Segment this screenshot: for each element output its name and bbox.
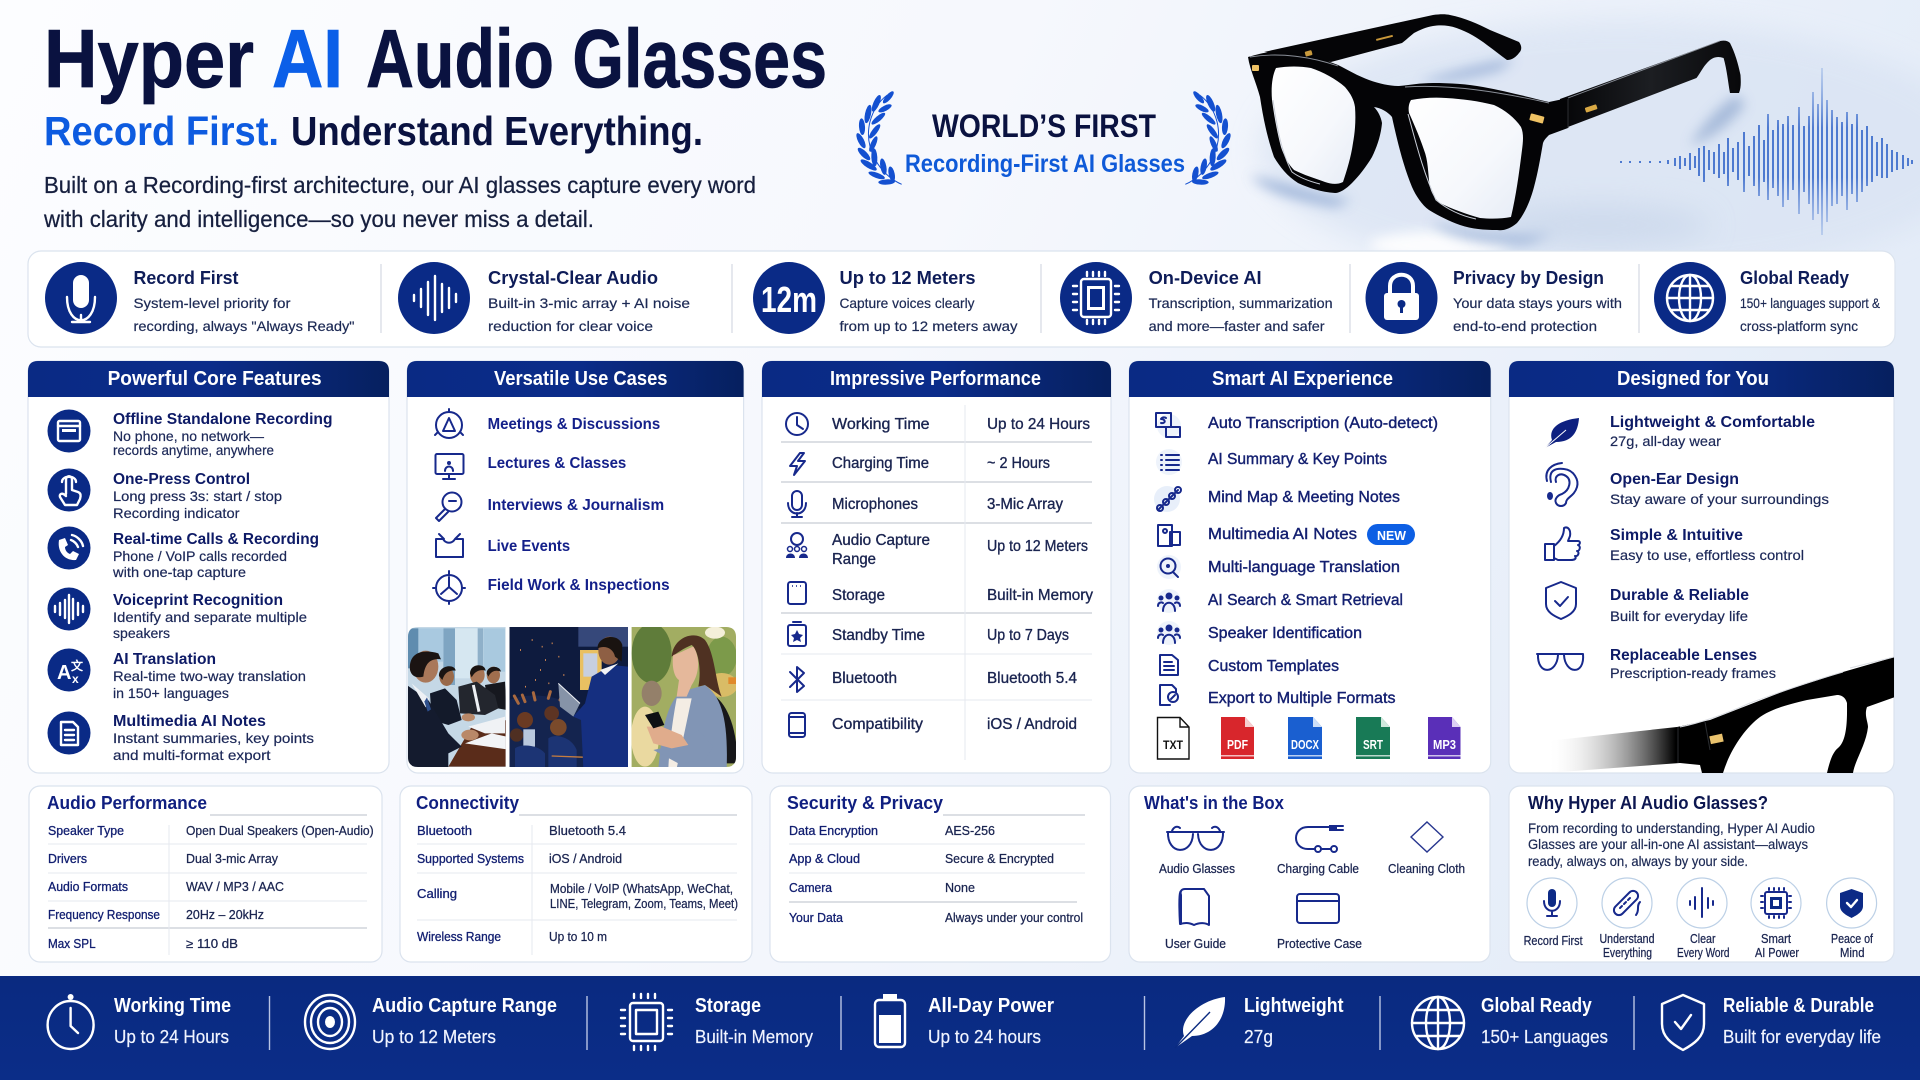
- use case: field work: [433, 571, 670, 604]
- ai feature: mind map: [1154, 486, 1400, 512]
- highlight: record first: System-level priority for: [134, 295, 291, 311]
- feature: calls and recording: with one-tap capture: [112, 564, 246, 580]
- use case: lectures: Lectures & Classes: [488, 455, 626, 472]
- feature: one-press control: [48, 468, 282, 521]
- design: lenses: [1537, 647, 1776, 681]
- feature: AI translation: [48, 648, 306, 701]
- ai feature: summary: [1156, 449, 1387, 475]
- panel: versatile use cases: [405, 361, 744, 773]
- highlight: global ready: 150+ languages support &: [1740, 295, 1881, 311]
- spec: compatibility: Compatibility: [832, 716, 923, 733]
- spec: audio capture range: Range: [832, 551, 876, 568]
- feature: multimedia notes: and multi-format export: [113, 747, 271, 763]
- box item: cleaning cloth: Cleaning Cloth: [1388, 862, 1465, 876]
- icon: TXT file: [1158, 718, 1189, 759]
- box item: protective case: Protective Case: [1277, 937, 1362, 951]
- table: security specs: AES-256: [945, 824, 995, 838]
- feature: voiceprint recognition: Identify and separate multiple: [113, 609, 307, 625]
- spec: charging time: ~ 2 Hours: [987, 455, 1050, 472]
- table: security specs: Camera: [789, 881, 832, 895]
- use case: interviews: [436, 492, 664, 521]
- feature: AI translation: x: [72, 672, 79, 686]
- feature: AI translation: AI Translation: [113, 651, 216, 668]
- box item: charging cable: [1277, 825, 1359, 876]
- table: connectivity specs: Bluetooth 5.4: [549, 824, 626, 838]
- ai feature: translation: [1157, 555, 1400, 579]
- icon: MP3 file: MP3: [1433, 737, 1456, 752]
- spec: audio capture range: [786, 532, 1088, 568]
- highlight: on-device AI: Transcription, summarization: [1149, 295, 1333, 311]
- ai feature: translation: Multi-language Translation: [1208, 559, 1400, 576]
- spec: storage: Storage: [832, 587, 885, 604]
- title: AI: [272, 12, 343, 105]
- icon: MP3 file: [1428, 717, 1460, 759]
- panel: powerful core features: [28, 361, 389, 773]
- use case: interviews: Interviews & Journalism: [488, 497, 664, 514]
- heading: Powerful Core Features: [108, 368, 322, 390]
- box item: audio glasses: Audio Glasses: [1159, 862, 1235, 876]
- stat: reliable and durable: [1662, 995, 1881, 1050]
- benefit: smart AI power: Smart: [1761, 932, 1791, 946]
- icon: left laurel: [855, 90, 902, 185]
- spec: storage: Built-in Memory: [987, 587, 1093, 604]
- table: audio specs: Audio Formats: [48, 880, 128, 894]
- benefit: peace of mind: Mind: [1840, 946, 1865, 960]
- feature: offline recording: [48, 410, 332, 458]
- benefit: clear every word: Clear: [1690, 932, 1716, 946]
- stat: storage: Built-in Memory: [695, 1027, 813, 1047]
- benefit: clear every word: [1677, 878, 1730, 960]
- spec: working time: Up to 24 Hours: [987, 416, 1090, 433]
- spec: microphones: Microphones: [832, 496, 918, 513]
- stat: lightweight: [1175, 995, 1344, 1048]
- badge text: [905, 108, 1185, 178]
- box item: protective case: [1277, 894, 1362, 951]
- heading: [407, 361, 744, 397]
- subtitle: Record First.: [44, 108, 279, 154]
- benefit: understand everything: Understand: [1600, 932, 1655, 946]
- box item: cleaning cloth: [1388, 822, 1465, 876]
- ai feature: search: [1157, 589, 1403, 613]
- stat: storage: Storage: [695, 995, 761, 1017]
- ai feature: export formats: Export to Multiple Formats: [1208, 690, 1396, 707]
- heading: [1509, 361, 1894, 397]
- stat: global ready: [1412, 995, 1608, 1049]
- panel: audio performance: [29, 786, 382, 962]
- description: [1528, 820, 1815, 869]
- heading: Connectivity: [416, 793, 519, 813]
- table: connectivity specs: [417, 824, 738, 944]
- stat: lightweight: 27g: [1244, 1027, 1273, 1047]
- stat: all-day power: Up to 24 hours: [928, 1027, 1041, 1047]
- description: Glasses are your all-in-one AI assistant—always: [1528, 836, 1808, 852]
- stat: all-day power: [875, 994, 1054, 1047]
- feature: calls and recording: Phone / VoIP calls recorded: [113, 548, 287, 564]
- highlight: up to 12 meters: from up to 12 meters away: [840, 318, 1018, 334]
- spec: bluetooth: Bluetooth 5.4: [987, 670, 1077, 687]
- feature: calls and recording: [48, 526, 319, 580]
- stat: reliable and durable: Built for everyday life: [1723, 1027, 1881, 1047]
- table: audio specs: Open Dual Speakers (Open-Audio): [186, 824, 374, 838]
- ai feature: speaker identification: [1157, 621, 1362, 645]
- sound waveform: [1621, 68, 1912, 235]
- table: audio specs: WAV / MP3 / AAC: [186, 880, 284, 894]
- table: security specs: [789, 824, 1083, 925]
- stat: working time: Working Time: [114, 995, 231, 1017]
- icon: TXT file: TXT: [1163, 738, 1184, 752]
- design: lenses: Replaceable Lenses: [1610, 647, 1757, 664]
- spec: working time: [786, 413, 1090, 435]
- highlight: on-device AI: and more—faster and safer: [1149, 318, 1325, 334]
- feature: voiceprint recognition: speakers: [113, 625, 170, 641]
- stat: working time: [48, 994, 231, 1049]
- heading: [762, 361, 1111, 397]
- icon: right laurel: [1185, 90, 1232, 185]
- box item: user guide: User Guide: [1165, 937, 1226, 951]
- highlight: privacy by design: Privacy by Design: [1453, 268, 1604, 288]
- highlight: global ready: Global Ready: [1740, 268, 1849, 288]
- design: open-ear: Open-Ear Design: [1610, 471, 1739, 488]
- highlight: on-device AI: On-Device AI: [1149, 268, 1262, 288]
- benefit: understand everything: Everything: [1603, 946, 1652, 960]
- icon: SRT file: SRT: [1363, 737, 1383, 752]
- title: Hyper: [44, 12, 254, 105]
- highlight: up to 12 meters: Capture voices clearly: [840, 295, 974, 311]
- design: lenses: Prescription-ready frames: [1610, 665, 1776, 681]
- heading: Versatile Use Cases: [494, 368, 668, 390]
- feature: one-press control: Long press 3s: start / stop: [113, 488, 282, 504]
- subtitle: Understand Everything.: [291, 108, 703, 154]
- icon: DOCX file: DOCX: [1291, 738, 1320, 752]
- benefit: smart AI power: AI Power: [1755, 946, 1799, 960]
- icon: DOCX file: [1288, 717, 1322, 759]
- use case: lectures: [436, 454, 626, 479]
- spec: standby time: [788, 622, 1069, 646]
- heading: Security & Privacy: [787, 793, 943, 813]
- badge text: Recording-First AI Glasses: [905, 150, 1185, 178]
- feature: one-press control: One-Press Control: [113, 471, 250, 488]
- table: connectivity specs: LINE, Telegram, Zoom, Teams, Meet): [550, 897, 738, 911]
- feature: voiceprint recognition: Voiceprint Recognition: [113, 592, 283, 609]
- highlight: global ready: cross-platform sync: [1740, 318, 1858, 334]
- spec: audio capture range: Audio Capture: [832, 532, 930, 549]
- highlight: record first: [45, 262, 355, 334]
- benefit: smart AI power: [1751, 878, 1801, 960]
- heading: Smart AI Experience: [1212, 368, 1393, 390]
- spec: microphones: [788, 491, 1063, 517]
- design: lightweight: [1545, 414, 1815, 449]
- panel: security and privacy: [770, 786, 1110, 962]
- table: connectivity specs: Wireless Range: [417, 930, 501, 944]
- highlight: record first: recording, always "Always Ready": [134, 318, 355, 334]
- panel: why hyper AI: [1509, 786, 1894, 962]
- ai feature: summary: AI Summary & Key Points: [1208, 451, 1387, 468]
- highlight: record first: Record First: [134, 268, 238, 288]
- table: audio specs: [48, 824, 374, 951]
- feature: AI translation: in 150+ languages: [113, 685, 229, 701]
- photo: business meeting: [408, 627, 506, 767]
- spec: bluetooth: [790, 667, 1077, 692]
- ai feature: multimedia notes: Multimedia AI Notes: [1208, 526, 1357, 543]
- design: simple: Easy to use, effortless control: [1610, 547, 1804, 563]
- icon: PDF file: [1221, 717, 1254, 759]
- description: From recording to understanding, Hyper AI Audio: [1528, 820, 1815, 836]
- spec: charging time: [790, 453, 1050, 475]
- stat: global ready: Global Ready: [1481, 995, 1592, 1017]
- table: security specs: App & Cloud: [789, 852, 860, 866]
- subtitle: [44, 108, 703, 154]
- spec: bluetooth: Bluetooth: [832, 670, 897, 687]
- highlight: crystal-clear audio: reduction for clear voice: [488, 318, 653, 334]
- table: connectivity specs: Bluetooth: [417, 824, 472, 838]
- use case: live events: [436, 534, 570, 557]
- badge: new: [1367, 524, 1415, 545]
- feature: multimedia notes: Instant summaries, key points: [113, 730, 314, 746]
- title: [44, 12, 827, 105]
- hero glasses: [1248, 14, 1745, 259]
- table: security specs: Secure & Encrypted: [945, 852, 1054, 866]
- intro paragraph: Built on a Recording-first architecture, our AI glasses capture every word: [44, 172, 756, 198]
- benefit: peace of mind: [1827, 878, 1877, 960]
- design: lightweight: Lightweight & Comfortable: [1610, 414, 1815, 431]
- heading: Why Hyper AI Audio Glasses?: [1528, 793, 1768, 813]
- design: durable: [1546, 582, 1749, 624]
- highlight: privacy by design: end-to-end protection: [1453, 318, 1597, 334]
- feature: multimedia notes: [48, 712, 314, 763]
- table: audio specs: Max SPL: [48, 937, 96, 951]
- spec: compatibility: [789, 713, 1077, 737]
- stat: lightweight: Lightweight: [1244, 995, 1344, 1017]
- design: durable: Durable & Reliable: [1610, 587, 1749, 604]
- panel: impressive performance: [762, 361, 1111, 773]
- feature: offline recording: records anytime, anywhere: [113, 442, 274, 458]
- box item: charging cable: Charging Cable: [1277, 862, 1359, 876]
- table: connectivity specs: Calling: [417, 887, 457, 901]
- design: durable: Built for everyday life: [1610, 608, 1748, 624]
- box item: user guide: [1165, 889, 1226, 951]
- table: connectivity specs: Up to 10 m: [549, 930, 607, 944]
- stat: reliable and durable: Reliable & Durable: [1723, 995, 1874, 1017]
- panel: designed for you: [1509, 361, 1895, 773]
- spec: working time: Working Time: [832, 416, 930, 433]
- badge: new: NEW: [1377, 528, 1407, 543]
- feature: AI translation: Real-time two-way translation: [113, 668, 306, 684]
- ai feature: transcription: [1156, 413, 1438, 438]
- intro paragraph: [43, 172, 756, 232]
- heading: What's in the Box: [1144, 793, 1284, 813]
- feature: one-press control: Recording indicator: [113, 505, 240, 521]
- highlight: on-device AI: [1060, 262, 1333, 334]
- ai feature: custom templates: [1160, 655, 1339, 675]
- ai feature: transcription: Auto Transcription (Auto-detect): [1208, 415, 1438, 432]
- highlight: privacy by design: [1366, 262, 1622, 334]
- design: open-ear: Stay aware of your surroundings: [1610, 491, 1829, 507]
- benefit: record first: Record First: [1524, 934, 1583, 948]
- icon: PDF file: PDF: [1227, 737, 1248, 752]
- ai feature: custom templates: Custom Templates: [1208, 658, 1339, 675]
- use case: meetings: [435, 409, 660, 438]
- table: audio specs: Frequency Response: [48, 908, 160, 922]
- stat: working time: Up to 24 Hours: [114, 1027, 229, 1047]
- highlight: privacy by design: Your data stays yours with: [1453, 295, 1622, 311]
- highlight: global ready: [1654, 262, 1881, 334]
- highlight: up to 12 meters: [753, 262, 1018, 334]
- highlight: up to 12 meters: 12m: [761, 279, 817, 320]
- spec: compatibility: iOS / Android: [987, 716, 1077, 733]
- intro paragraph: with clarity and intelligence—so you never miss a detail.: [43, 206, 594, 232]
- table: audio specs: 20Hz – 20kHz: [186, 908, 264, 922]
- feature: multimedia notes: Multimedia AI Notes: [113, 713, 266, 730]
- table: security specs: None: [945, 881, 975, 895]
- spec: standby time: Up to 7 Days: [987, 627, 1069, 644]
- ai feature: mind map: Mind Map & Meeting Notes: [1208, 489, 1400, 506]
- use case: live events: Live Events: [488, 538, 570, 555]
- spec: storage: [788, 582, 1093, 604]
- feature: offline recording: Offline Standalone Recording: [113, 411, 332, 428]
- design: open-ear: [1546, 463, 1829, 507]
- stat: audio capture range: Up to 12 Meters: [372, 1027, 496, 1047]
- table: audio specs: Speaker Type: [48, 824, 124, 838]
- design: simple: Simple & Intuitive: [1610, 527, 1743, 544]
- panel: connectivity: [400, 786, 752, 962]
- table: security specs: Your Data: [789, 911, 843, 925]
- spec: microphones: 3-Mic Array: [987, 496, 1063, 513]
- icon: SRT file: [1356, 717, 1390, 759]
- table: connectivity specs: Mobile / VoIP (WhatsApp, WeChat,: [550, 882, 733, 896]
- photo: glasses close-up: [1547, 657, 1895, 773]
- panel: highlights strip: [28, 251, 1895, 347]
- stat: storage: [621, 994, 813, 1050]
- stat: all-day power: All-Day Power: [928, 995, 1054, 1017]
- spec: standby time: Standby Time: [832, 627, 925, 644]
- stat: global ready: 150+ Languages: [1481, 1027, 1608, 1047]
- panel: smart AI experience: [1129, 361, 1491, 773]
- benefit: peace of mind: Peace of: [1831, 932, 1873, 946]
- feature: AI translation: 文: [71, 658, 84, 673]
- heading: Designed for You: [1617, 368, 1769, 390]
- feature: voiceprint recognition: [48, 588, 307, 641]
- benefit: clear every word: Every Word: [1677, 946, 1730, 960]
- table: connectivity specs: Supported Systems: [417, 852, 524, 866]
- table: audio specs: ≥ 110 dB: [186, 937, 238, 951]
- footer band: [0, 976, 1920, 1080]
- use case: field work: Field Work & Inspections: [488, 577, 670, 594]
- table: audio specs: Dual 3-mic Array: [186, 852, 279, 866]
- photo: live event: [508, 627, 628, 768]
- badge text: WORLD’S FIRST: [932, 108, 1156, 144]
- panel: what's in the box: [1129, 786, 1490, 962]
- badge: world's first: [855, 90, 1232, 185]
- benefit: record first: [1524, 878, 1583, 948]
- highlight: crystal-clear audio: [398, 262, 690, 334]
- ai feature: speaker identification: Speaker Identification: [1208, 625, 1362, 642]
- highlight: crystal-clear audio: Built-in 3-mic array + AI noise: [488, 295, 690, 311]
- ai feature: search: AI Search & Smart Retrieval: [1208, 592, 1403, 609]
- feature: offline recording: No phone, no network—: [113, 428, 264, 444]
- photo: woman with phone: [631, 623, 738, 768]
- stat: audio capture range: Audio Capture Range: [372, 995, 557, 1017]
- highlight: crystal-clear audio: Crystal-Clear Audio: [488, 268, 658, 288]
- heading: [1129, 361, 1491, 397]
- ai feature: export formats: [1160, 685, 1396, 707]
- feature: AI translation: A: [57, 662, 71, 684]
- heading: Impressive Performance: [830, 368, 1041, 390]
- table: audio specs: Drivers: [48, 852, 87, 866]
- heading: [28, 361, 389, 397]
- title: Audio Glasses: [366, 12, 827, 105]
- table: connectivity specs: iOS / Android: [549, 852, 622, 866]
- table: security specs: Always under your control: [945, 911, 1083, 925]
- feature: calls and recording: Real-time Calls & Recording: [113, 531, 319, 548]
- spec: charging time: Charging Time: [832, 455, 929, 472]
- table: security specs: Data Encryption: [789, 824, 878, 838]
- ai feature: multimedia notes: [1158, 524, 1415, 546]
- use case: meetings: Meetings & Discussions: [488, 416, 660, 433]
- photos: usage scenes: [405, 620, 738, 773]
- heading: Audio Performance: [47, 793, 207, 813]
- highlight: up to 12 meters: Up to 12 Meters: [840, 268, 976, 288]
- box item: audio glasses: [1159, 827, 1235, 876]
- spec: audio capture range: Up to 12 Meters: [987, 538, 1088, 555]
- stat: audio capture range: [305, 995, 557, 1049]
- description: ready, always on, always by your side.: [1528, 853, 1748, 869]
- benefit: understand everything: [1600, 878, 1655, 960]
- design: simple: [1545, 527, 1804, 563]
- design: lightweight: 27g, all-day wear: [1610, 433, 1721, 449]
